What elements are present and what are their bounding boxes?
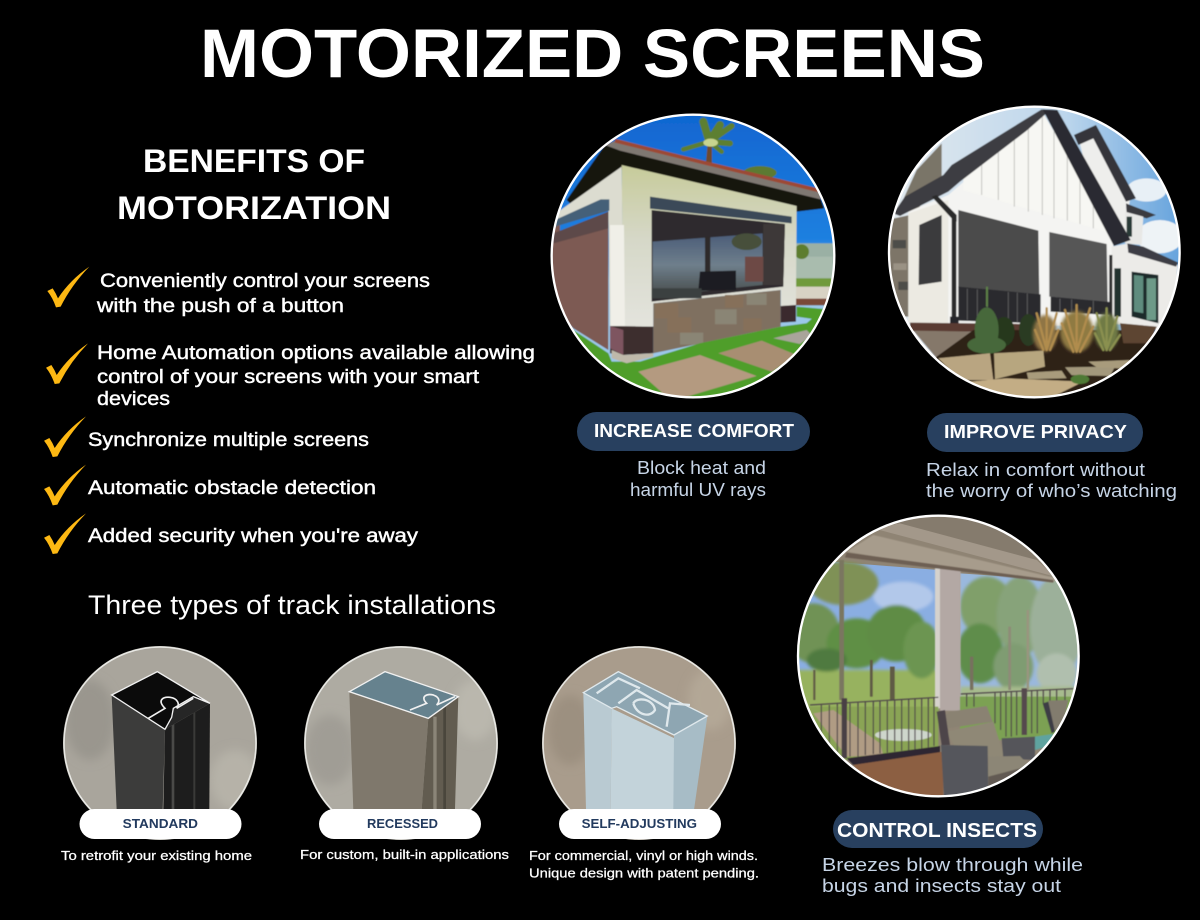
heading: benefits: MOTORIZATION <box>117 190 391 226</box>
badge: control insects: CONTROL INSECTS <box>837 820 1037 842</box>
text: relax in comfort: Relax in comfort without <box>926 460 1145 480</box>
benefit 3 text: Synchronize multiple screens <box>88 429 369 451</box>
track: standard <box>63 646 260 840</box>
benefit 1 text: with the push of a button <box>96 295 344 317</box>
badge: improve privacy <box>927 413 1143 452</box>
photo: house with screens, improve privacy <box>888 106 1181 398</box>
icon: check 1 <box>47 267 89 307</box>
benefit 2 text: control of your screens with your smart <box>97 366 480 388</box>
caption: recessed: For custom, built-in applications <box>300 848 509 862</box>
badge: increase comfort <box>577 412 810 451</box>
panel: benefits of motorization <box>44 143 535 554</box>
label: recessed <box>319 809 481 839</box>
text: breezes: bugs and insects stay out <box>822 876 1061 896</box>
caption: self-adjusting: Unique design with patent pending. <box>529 866 759 880</box>
text: breezes: Breezes blow through while <box>822 855 1083 875</box>
heading: benefits <box>117 143 391 226</box>
icon: check 5 <box>44 513 86 554</box>
benefit 2 text <box>97 342 535 410</box>
badge: control insects <box>833 810 1043 848</box>
benefit 5 text: Added security when you're away <box>88 525 418 547</box>
caption: self-adjusting <box>529 849 759 880</box>
label: standard <box>80 809 242 839</box>
icon: check 2 <box>46 343 88 384</box>
track: self-adjusting <box>542 646 736 840</box>
caption: self-adjusting: For commercial, vinyl or high winds. <box>529 849 758 863</box>
icon: check 3 <box>44 416 86 457</box>
benefit 2 text: Home Automation options available allowing <box>97 342 535 364</box>
photo: screened porch, control insects <box>796 514 1080 798</box>
benefit 1 text <box>96 270 430 317</box>
text: relax in comfort: the worry of who’s watching <box>926 481 1177 501</box>
text: block heat <box>630 458 766 500</box>
label: recessed: RECESSED <box>367 816 438 831</box>
caption: standard: To retrofit your existing home <box>61 849 252 863</box>
benefit 1 text: Conveniently control your screens <box>100 270 430 292</box>
label: standard: STANDARD <box>123 816 198 831</box>
label: self-adjusting <box>559 809 721 839</box>
text: relax in comfort <box>926 460 1177 501</box>
label: self-adjusting: SELF-ADJUSTING <box>582 816 697 831</box>
text: breezes <box>822 855 1083 896</box>
heading: benefits: BENEFITS OF <box>143 143 365 179</box>
icon: check 4 <box>44 465 86 505</box>
photo: patio with screen, increase comfort <box>550 114 836 398</box>
text: block heat: harmful UV rays <box>630 480 766 500</box>
badge: increase comfort: INCREASE COMFORT <box>594 421 794 441</box>
track: recessed <box>304 646 498 840</box>
benefit 2 text: devices <box>97 388 170 410</box>
title: MOTORIZED SCREENS <box>200 15 985 92</box>
subheading: three types: Three types of track installations <box>88 590 496 620</box>
text: block heat: Block heat and <box>637 458 766 478</box>
badge: improve privacy: IMPROVE PRIVACY <box>944 422 1127 442</box>
benefit 4 text: Automatic obstacle detection <box>88 477 376 499</box>
